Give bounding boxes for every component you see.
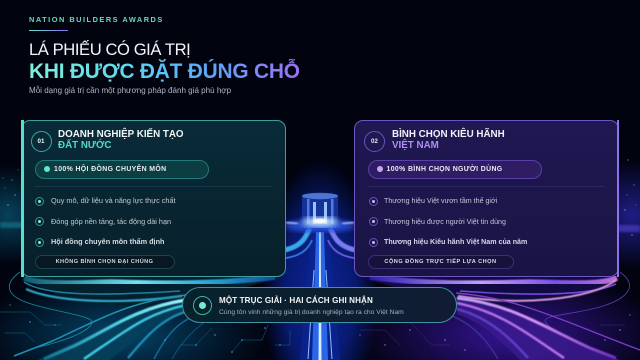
bullet 3 xyxy=(368,238,378,246)
card title: ĐẤT NƯỚC xyxy=(58,140,112,151)
title line 1: LÁ PHIẾU CÓ GIÁ TRỊ xyxy=(29,40,190,59)
pill dot xyxy=(376,166,382,172)
bullet text 2: Đóng góp nền tảng, tác động dài hạn xyxy=(51,216,171,226)
number badge 02 xyxy=(364,130,385,152)
footer pill: không bình chọn đại chúng xyxy=(34,255,174,269)
callout heading: MỘT TRỤC GIẢI · HAI CÁCH GHI NHẬN xyxy=(219,296,373,304)
accent bar left xyxy=(21,120,24,276)
bullet 2 xyxy=(35,217,44,226)
footer pill: cộng đồng trực tiếp lựa chọn xyxy=(368,255,514,269)
divider xyxy=(34,186,272,187)
left circuit traces xyxy=(0,312,290,352)
centre road xyxy=(300,235,340,360)
callout subtext: Cùng tôn vinh những giá trị doanh nghiệp tạo ra cho Việt Nam xyxy=(219,308,404,316)
bullet text 1: Thương hiệu Việt vươn tầm thế giới xyxy=(384,197,497,205)
bullet 3 xyxy=(35,238,44,246)
card title: DOANH NGHIỆP KIẾN TẠO xyxy=(58,128,184,140)
title line 2: KHI ĐƯỢC ĐẶT ĐÚNG CHỖ xyxy=(29,60,300,83)
right streams xyxy=(457,298,620,360)
pill text: 100% HỘI ĐỒNG CHUYÊN MÔN xyxy=(54,166,166,172)
left stack discs xyxy=(20,268,280,306)
header accent line xyxy=(29,30,68,31)
footer pill: cộng đồng trực tiếp lựa chọn: CỘNG ĐỒNG TRỰC TIẾP LỰA CHỌN xyxy=(384,259,497,265)
pill text: 100% BÌNH CHỌN NGƯỜI DÙNG xyxy=(386,166,503,172)
bullet text 1: Quy mô, dữ liệu và năng lực thực chất xyxy=(51,196,176,205)
bullet text 2: Thương hiệu được người Việt tin dùng xyxy=(384,218,506,226)
right circuit traces xyxy=(360,322,625,345)
number badge 01 xyxy=(30,130,52,152)
bullet 2 xyxy=(368,217,378,226)
subtitle: Mỗi dạng giá trị cần một phương pháp đánh giá phù hợp xyxy=(29,86,231,95)
dots xyxy=(2,170,281,353)
bullet list xyxy=(369,197,527,247)
card title xyxy=(58,128,184,151)
callout: một trục giải xyxy=(182,287,457,323)
number badge 02: 02 xyxy=(371,138,378,144)
pill dot xyxy=(44,166,50,172)
card title: VIỆT NAM xyxy=(392,140,439,151)
callout icon xyxy=(193,296,212,315)
icon dot xyxy=(199,302,206,309)
bullet 1 xyxy=(35,196,44,206)
card title: BÌNH CHỌN KIÊU HÃNH xyxy=(392,128,505,140)
bullet list xyxy=(35,196,176,247)
right stack discs xyxy=(360,268,620,306)
footer pill: không bình chọn đại chúng: KHÔNG BÌNH CHỌN ĐẠI CHÚNG xyxy=(56,259,153,265)
bullet text 3: Hội đồng chuyên môn thẩm định xyxy=(51,237,165,246)
pill: 100% hội đồng chuyên môn xyxy=(34,160,208,178)
tower xyxy=(302,194,338,224)
accent bar right xyxy=(616,120,619,276)
header: eyebrow: NATION BUILDERS AWARDS xyxy=(29,15,164,24)
panel: doanh nghiệp kiến tạo xyxy=(21,120,286,277)
divider xyxy=(367,186,605,187)
card title xyxy=(392,128,505,151)
pill: 100% bình chọn người dùng xyxy=(368,160,542,178)
left streams xyxy=(38,298,185,360)
bullet text 3: Thương hiệu Kiêu hãnh Việt Nam của năm xyxy=(384,238,527,246)
bullet 1 xyxy=(368,196,378,206)
panel: bình chọn kiêu hãnh xyxy=(354,120,619,277)
number badge 01: 01 xyxy=(38,138,44,144)
